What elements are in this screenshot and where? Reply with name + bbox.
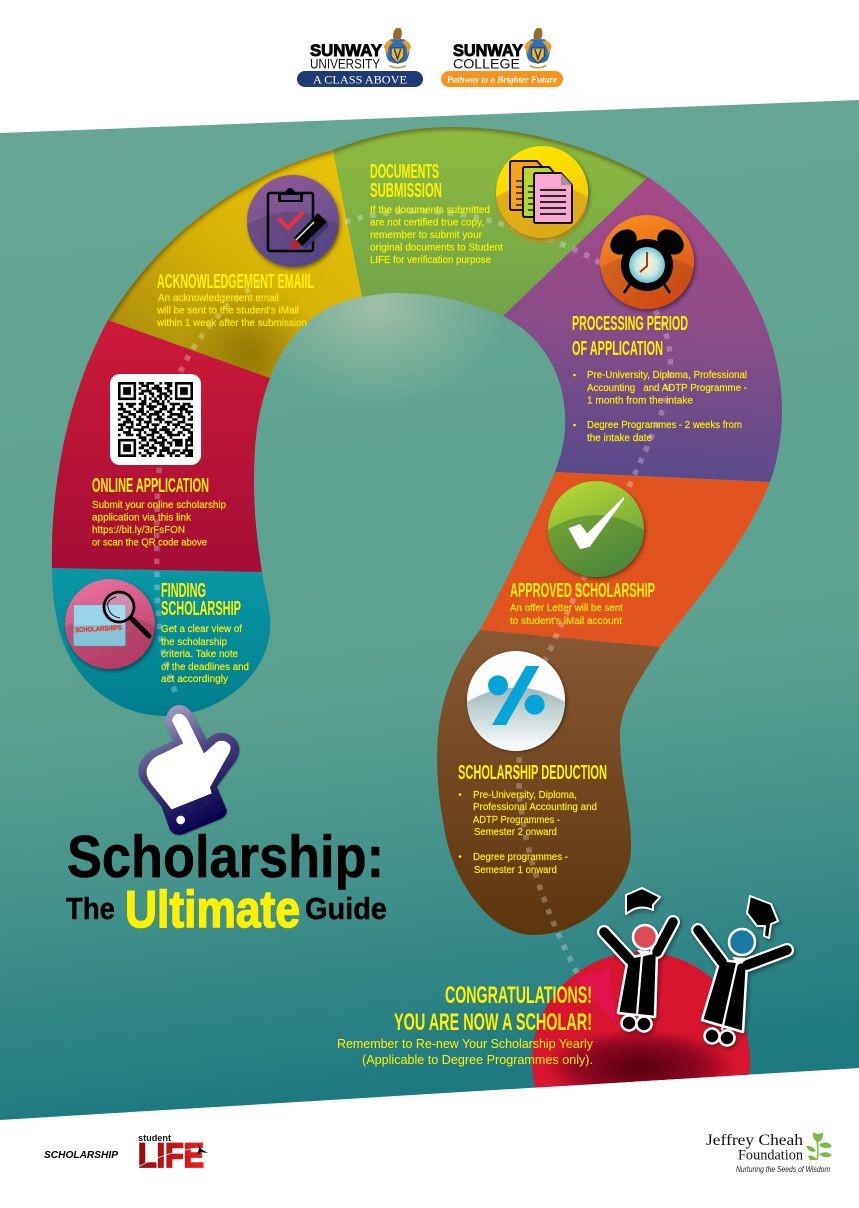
icon: documents <box>496 146 588 243</box>
logo: Sunway College: SUNWAY <box>453 41 524 60</box>
body text: the intake date <box>587 433 652 444</box>
body text: An acknowledgement email <box>158 293 279 304</box>
footer: Jeffrey Cheah Foundation logo: Nurturing the Seeds of Wisdom <box>736 1164 830 1174</box>
callout: congratulations: Remember to Re-new Your Scholarship Yearly <box>337 1037 594 1051</box>
graduates <box>604 888 787 1046</box>
icon: clipboard <box>247 175 339 271</box>
body text: or scan the QR code above <box>92 538 207 548</box>
body text: the scholarship <box>161 637 227 648</box>
body text <box>573 370 747 444</box>
heading: SCHOLARSHIP <box>161 598 241 620</box>
logo: Sunway University: A CLASS ABOVE <box>313 74 407 86</box>
step: approved scholarship <box>510 481 655 627</box>
title line: Ultimate: Ultimate <box>125 881 300 939</box>
body text: LIFE for verification purpose <box>370 255 491 266</box>
icon: magnifier over card <box>65 579 155 672</box>
body text: criteria. Take note <box>161 649 238 660</box>
body text <box>156 293 307 329</box>
body text: Degree programmes - <box>473 852 568 863</box>
heading <box>161 580 241 620</box>
logo: Sunway University: UNIVERSITY <box>310 56 381 72</box>
body text: within 1 week after the submission <box>156 318 307 329</box>
callout: congratulations <box>337 982 594 1067</box>
body text: Submit your online scholarship <box>92 500 226 511</box>
dome: red podium <box>532 952 750 1088</box>
body text: ADTP Programmes - <box>473 815 560 826</box>
body text: An offer Letter will be sent <box>510 603 623 614</box>
heading: APPROVED SCHOLARSHIP <box>510 580 655 602</box>
icon: alarm clock <box>600 215 694 315</box>
body text: act accordingly <box>161 674 228 685</box>
QR code <box>110 374 201 465</box>
body text <box>161 624 249 685</box>
step: documents submission <box>370 146 588 266</box>
body text: Pre-University, Diploma, <box>473 790 577 801</box>
title line: The: The <box>66 891 115 926</box>
step: scholarship deduction <box>458 651 607 876</box>
body text <box>370 205 503 266</box>
heading: DOCUMENTS <box>370 161 439 183</box>
body text: will be sent to the student’s iMail <box>156 306 299 316</box>
hole highlight <box>240 205 510 405</box>
footer: student LIFE logo: LIFE <box>138 1137 204 1175</box>
segment: acknowledgement email <box>108 150 362 378</box>
segment: documents submission <box>333 127 648 316</box>
body text: Semester 1 onward <box>474 865 557 876</box>
icon: percent <box>467 651 565 751</box>
title <box>66 824 387 939</box>
body text: Professional Accounting and <box>473 802 597 813</box>
segment: finding scholarship <box>52 568 270 716</box>
footer: Jeffrey Cheah Foundation logo: Jeffrey Cheah <box>706 1132 803 1149</box>
segment: processing period <box>503 177 782 482</box>
logo: Sunway University: SUNWAY <box>310 41 383 60</box>
body text: original documents to Student <box>370 242 503 254</box>
segment: approved scholarship <box>480 472 770 647</box>
question mark path <box>52 127 782 935</box>
body text: application via this link <box>92 512 192 524</box>
graduate: right <box>698 896 787 1046</box>
callout: congratulations: (Applicable to Degree Programmes only). <box>362 1053 593 1067</box>
heading <box>572 313 688 360</box>
body text: Degree Programmes - 2 weeks from <box>587 420 742 431</box>
body text: Semester 2 onward <box>474 827 557 838</box>
heading: ONLINE APPLICATION <box>92 475 209 497</box>
step: acknowledgement email <box>156 175 339 329</box>
body text: 1 month from the intake <box>587 396 693 406</box>
segment: scholarship deduction <box>437 630 660 935</box>
segment: acknowledgement shading <box>108 150 362 378</box>
heading: ACKNOWLEDGEMENT EMAIIL <box>157 271 314 293</box>
heading: PROCESSING PERIOD <box>572 313 688 335</box>
inner edge shading <box>108 127 648 320</box>
body text: are not certified true copy, <box>370 218 484 228</box>
footer: scholarship label: SCHOLARSHIP <box>44 1149 119 1161</box>
callout: congratulations: CONGRATULATIONS! <box>445 982 592 1009</box>
title line: Guide: Guide <box>305 891 387 926</box>
icon: pointing hand <box>138 705 239 835</box>
heading: SUBMISSION <box>370 180 442 202</box>
icon: check mark <box>548 481 644 578</box>
footer: Jeffrey Cheah Foundation logo <box>706 1132 832 1174</box>
callout: congratulations: YOU ARE NOW A SCHOLAR! <box>394 1009 592 1036</box>
body text: Pre-University, Diploma, Professional <box>587 370 747 381</box>
body text: remember to submit your <box>370 230 483 241</box>
logo: Sunway University <box>297 28 423 87</box>
footer: Jeffrey Cheah Foundation logo: Foundation <box>738 1148 804 1164</box>
body text <box>92 500 226 548</box>
icon: magnifier over card: SCHOLARSHIPS <box>75 625 123 634</box>
heading <box>370 161 442 202</box>
dotted trail <box>157 211 670 975</box>
body text: to student’s iMail account <box>510 616 622 627</box>
step: processing period <box>572 215 747 444</box>
body text: Get a clear view of <box>161 624 242 635</box>
body text: Accounting and ADTP Programme - <box>587 383 747 394</box>
heading: FINDING <box>161 580 206 602</box>
footer: student LIFE logo: student <box>138 1133 171 1143</box>
segment: online application <box>52 320 270 572</box>
logo: Sunway College <box>441 28 563 87</box>
graduate: left <box>604 888 673 1032</box>
title line: Scholarship: Scholarship: <box>67 824 384 890</box>
body text <box>510 603 623 627</box>
body text: of the deadlines and <box>161 662 249 673</box>
body text <box>459 790 597 876</box>
heading: OF APPLICATION <box>572 338 663 360</box>
body text: https://bit.ly/3rFsFON <box>92 525 185 536</box>
step: finding scholarship <box>65 579 249 685</box>
logo: Sunway College: Pathway to a Brighter Future <box>447 76 558 86</box>
body text: If the documents submitted <box>370 205 490 216</box>
step: online application <box>92 374 226 548</box>
header logos <box>297 28 563 87</box>
heading: SCHOLARSHIP DEDUCTION <box>458 762 607 784</box>
logo: Sunway College: COLLEGE <box>453 56 520 72</box>
